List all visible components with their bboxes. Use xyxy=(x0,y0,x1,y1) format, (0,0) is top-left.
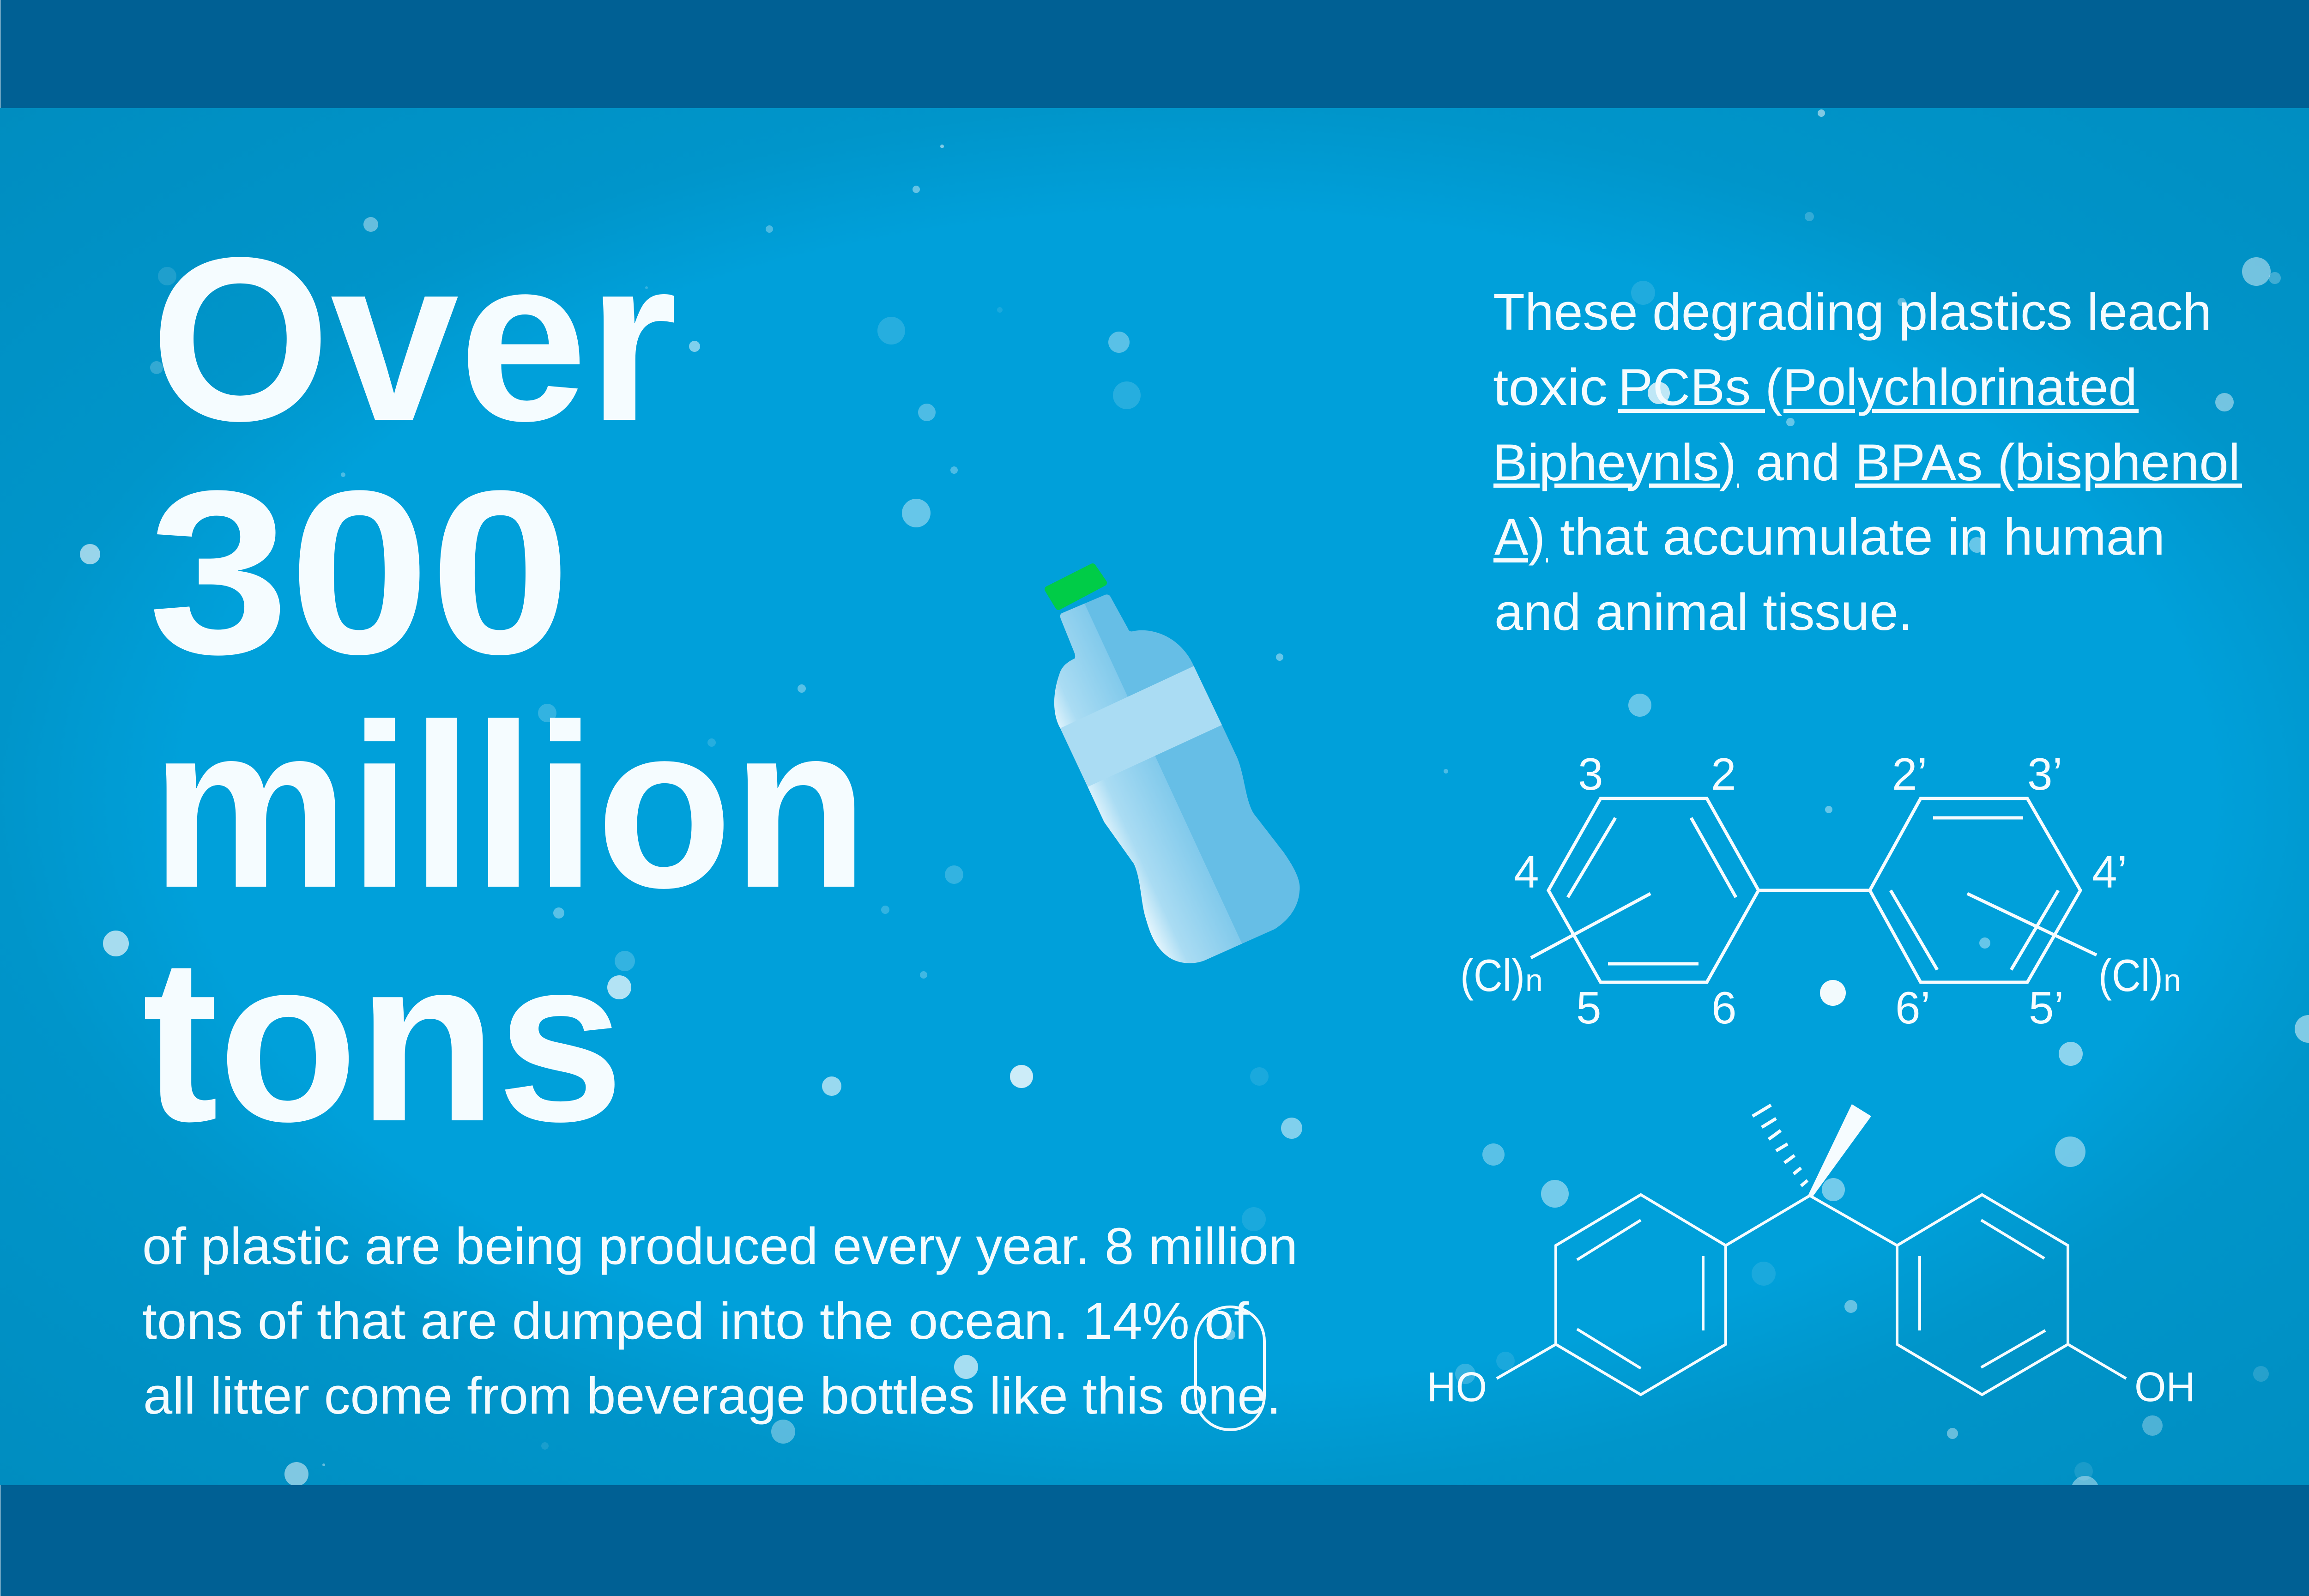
text block: toxic chemicals: and xyxy=(1756,434,1840,491)
PCB labels: 5’ xyxy=(2029,982,2064,1033)
bottle body xyxy=(1054,594,1300,963)
BPA hashed bond xyxy=(1753,1105,1807,1186)
PCB labels xyxy=(1460,749,2181,1033)
PCB labels: 4’ xyxy=(2092,846,2127,897)
text block: toxic chemicals: A) xyxy=(1494,508,1545,566)
text block: toxic chemicals: BPAs (bisphenol xyxy=(1855,434,2240,491)
bottle cap xyxy=(1048,567,1104,607)
text block: toxic chemicals: toxic xyxy=(1493,358,1608,416)
icon: plastic bottle xyxy=(1045,563,1300,963)
PCB labels: 5 xyxy=(1576,982,1602,1033)
text block: toxic chemicals: These degrading plastics leach xyxy=(1493,283,2212,341)
top band xyxy=(0,0,2309,108)
heading: Over 300 million tons: tons xyxy=(142,910,624,1170)
text block: plastic production facts: all litter come from beverage bottles like this one. xyxy=(143,1367,1281,1425)
PCB labels: n xyxy=(1525,963,1543,998)
BPA wedge bond xyxy=(1808,1104,1871,1197)
heading: Over 300 million tons: 300 xyxy=(148,442,571,703)
BPA bonds xyxy=(1497,1195,2126,1395)
PCB labels: 2 xyxy=(1711,749,1736,799)
text block: toxic chemicals: and animal tissue. xyxy=(1494,583,1913,641)
chart: BPA molecular structure xyxy=(1427,1104,2195,1410)
heading: Over 300 million tons xyxy=(142,209,868,1170)
text block: toxic chemicals: PCBs (Polychlorinated xyxy=(1618,358,2137,416)
chart: PCB molecular structure xyxy=(1460,749,2181,1033)
bottom band xyxy=(0,1485,2309,1596)
PCB labels: 4 xyxy=(1514,846,1539,897)
text block: plastic production facts xyxy=(142,1217,1298,1425)
text block: toxic chemicals xyxy=(1493,283,2242,641)
PCB labels: 6’ xyxy=(1895,982,1930,1033)
underlines xyxy=(1493,409,2242,562)
text block: toxic chemicals: Bipheynls) xyxy=(1493,434,1736,491)
BPA labels xyxy=(1427,1364,2195,1410)
PCB bonds xyxy=(1531,798,2097,982)
PCB labels: 3 xyxy=(1578,749,1603,799)
BPA labels: OH xyxy=(2134,1364,2195,1410)
PCB labels: 6 xyxy=(1711,982,1737,1033)
PCB labels: (Cl) xyxy=(2098,950,2163,1001)
text block: plastic production facts: tons of that are dumped into the ocean. 14% of xyxy=(142,1292,1249,1350)
text block: toxic chemicals: that accumulate in human xyxy=(1560,508,2165,566)
PCB labels: 2’ xyxy=(1892,749,1927,799)
PCB labels: (Cl) xyxy=(1460,950,1525,1001)
heading: Over 300 million tons: million xyxy=(151,676,868,937)
BPA labels: HO xyxy=(1427,1364,1487,1410)
icon: rounded oval outline xyxy=(1196,1307,1264,1430)
heading: Over 300 million tons: Over xyxy=(151,209,677,470)
PCB labels: 3’ xyxy=(2027,749,2062,799)
PCB labels: n xyxy=(2164,963,2181,998)
text block: plastic production facts: of plastic are being produced every year. 8 million xyxy=(142,1217,1298,1275)
